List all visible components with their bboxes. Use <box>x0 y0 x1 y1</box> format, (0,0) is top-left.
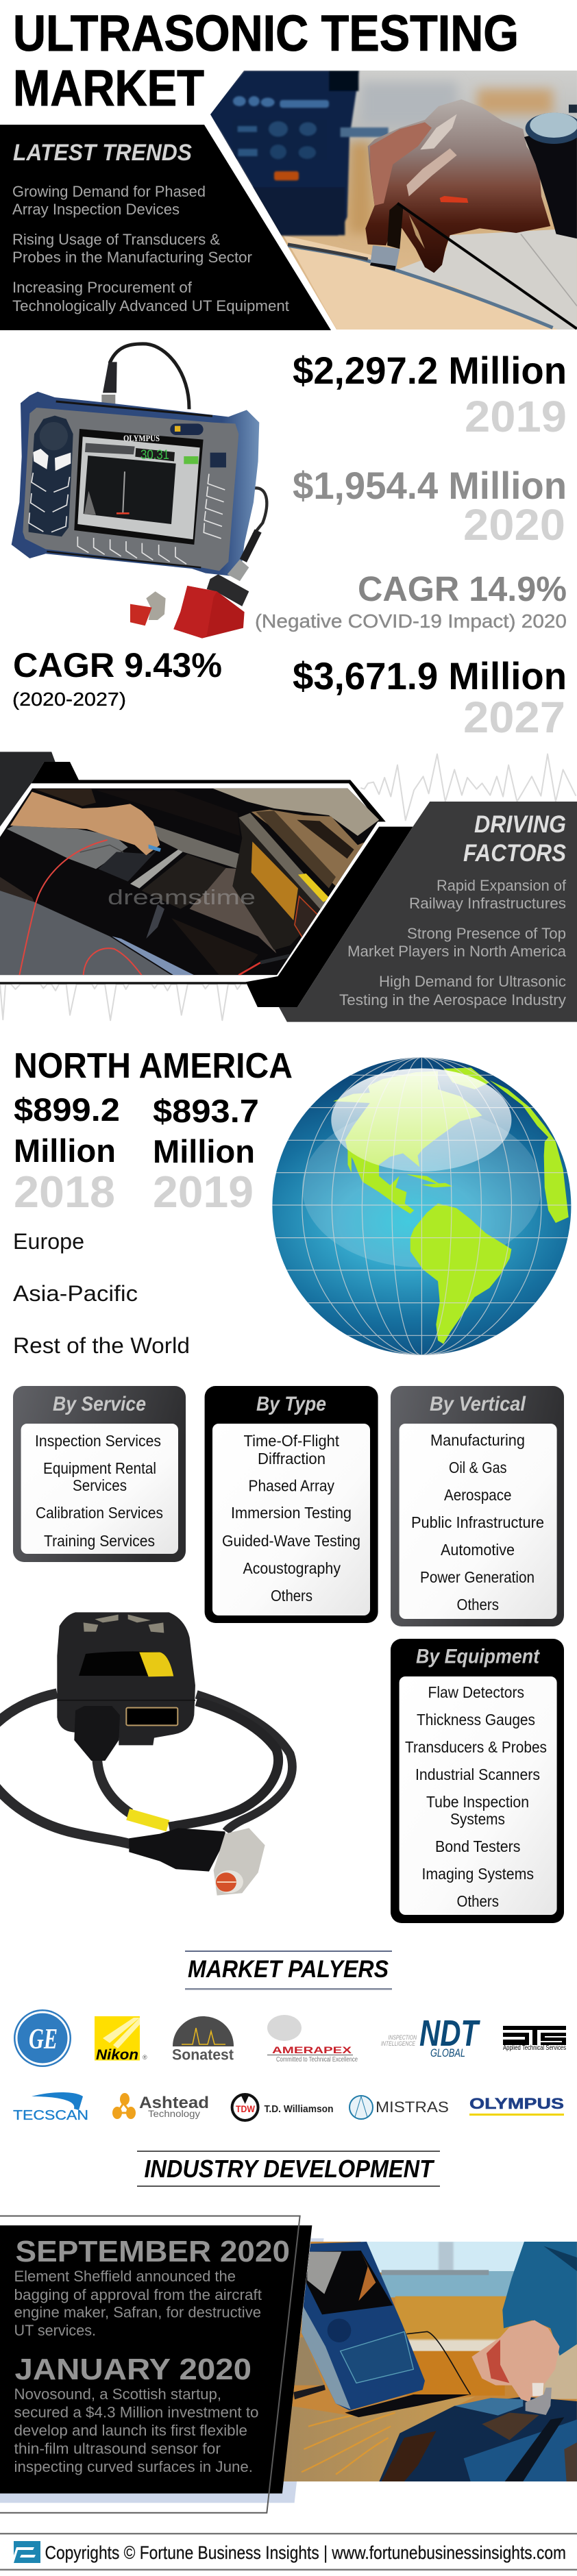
connector <box>129 1828 226 1872</box>
driving factors list: Testing in the Aerospace Industry <box>339 991 566 1008</box>
stat: forecast cagr: CAGR 9.43% <box>13 646 222 684</box>
items: Equipment Rental <box>43 1459 156 1477</box>
items: Acoustography <box>243 1559 341 1577</box>
tube <box>379 2397 577 2481</box>
stat: covid cagr <box>255 569 567 632</box>
heading: latest trends: LATEST TRENDS <box>13 140 192 166</box>
items: Others <box>456 1892 499 1910</box>
development: january 2020: inspecting curved surfaces in June. <box>14 2458 253 2475</box>
items: Training Services <box>44 1532 155 1550</box>
dark corner shape <box>0 752 56 827</box>
trend list: Technologically Advanced UT Equipment <box>12 297 289 314</box>
title <box>13 5 519 116</box>
logo: Amerapex: AMERAPEX <box>272 2044 352 2055</box>
logo: NDT Global: NDT <box>419 2013 480 2054</box>
device screen labels: 30.31 <box>140 448 169 462</box>
items: Aerospace <box>444 1486 511 1504</box>
photo: field ultrasonic inspection <box>281 2237 577 2484</box>
logo: Amerapex <box>267 2015 358 2064</box>
black panel background <box>0 2225 312 2493</box>
heading: market players: MARKET PALYERS <box>188 1956 389 1983</box>
items <box>405 1683 547 1910</box>
watch <box>524 123 577 238</box>
hand <box>471 2320 560 2403</box>
stat: 2027 market value <box>293 654 567 742</box>
items: Diffraction <box>258 1450 326 1467</box>
items: Guided-Wave Testing <box>222 1532 360 1550</box>
logo: NDT Global: INTELLIGENCE <box>381 2040 416 2047</box>
title: MARKET <box>13 60 204 116</box>
driving factors list <box>339 877 567 1008</box>
items: Calibration Services <box>36 1504 163 1522</box>
image: thickness gauge probe with cable <box>0 1612 292 1896</box>
driving factors list: Rapid Expansion of <box>437 877 567 894</box>
stat: 2020 market value: $1,954.4 Million <box>293 464 567 507</box>
photo watermark: dreamstime <box>108 885 256 909</box>
icon: Fortune Business Insights logo <box>14 2541 40 2563</box>
items: Industrial Scanners <box>415 1766 540 1783</box>
value 2019: $893.7 <box>153 1093 259 1129</box>
stat: 2019 market value: 2019 <box>465 392 567 441</box>
development: september 2020: engine maker, Safran, for destructive <box>14 2303 261 2321</box>
jacket <box>502 2242 577 2355</box>
logo: NDT Global: INSPECTION <box>388 2034 417 2041</box>
items: Inspection Services <box>35 1432 161 1450</box>
items: Phased Array <box>248 1477 334 1495</box>
stat: 2027 market value: 2027 <box>463 693 565 742</box>
items: Systems <box>450 1810 505 1828</box>
section: driving factors <box>0 752 577 1022</box>
items: Services <box>73 1476 127 1494</box>
heading: north america: NORTH AMERICA <box>14 1046 293 1086</box>
other regions: Rest of the World <box>13 1333 190 1358</box>
development: january 2020: secured a $4.3 Million investment to <box>14 2403 259 2421</box>
development: january 2020: thin-film ultrasound sensor for <box>14 2440 221 2457</box>
instrument <box>302 2242 425 2410</box>
icon: globe <box>258 1057 577 1355</box>
panel: latest trends <box>0 125 331 330</box>
logo: Sonatest: Sonatest <box>172 2046 234 2064</box>
stat: forecast cagr <box>12 646 222 710</box>
hand <box>365 99 550 273</box>
black frame <box>32 762 386 821</box>
pipe surface <box>283 2397 475 2481</box>
stat: 2020 market value: 2020 <box>463 500 565 549</box>
heading: industry development: INDUSTRY DEVELOPMENT <box>144 2155 435 2183</box>
card: by service <box>13 1386 186 1562</box>
logo: T.D. Williamson: TDW <box>236 2103 256 2114</box>
items: Others <box>456 1596 499 1613</box>
trend list: Array Inspection Devices <box>12 201 180 218</box>
value 2019: Million <box>153 1133 255 1169</box>
logo: Mistras: MISTRAS <box>376 2098 449 2116</box>
footer <box>0 2533 577 2571</box>
logo: Amerapex: Committed to Technical Excellence <box>276 2056 358 2064</box>
driving factors list: High Demand for Ultrasonic <box>379 973 566 990</box>
logos: market players <box>13 2009 566 2123</box>
panel: regional stats <box>13 1046 293 1358</box>
light blue backing <box>0 2238 324 2503</box>
logo: GE: GE <box>29 2024 58 2055</box>
stat: forecast cagr: (2020-2027) <box>12 689 126 710</box>
stat: 2019 market value: $2,297.2 Million <box>293 349 567 392</box>
items <box>35 1432 163 1550</box>
other regions: Asia-Pacific <box>13 1281 138 1306</box>
items: Bond Testers <box>435 1837 521 1855</box>
items: Imaging Systems <box>422 1865 534 1883</box>
heading: By Type <box>256 1393 326 1415</box>
logo: ATS <box>503 2026 566 2052</box>
wires <box>19 840 108 975</box>
other regions <box>13 1229 190 1358</box>
value 2018: Million <box>14 1132 116 1169</box>
items <box>411 1431 544 1613</box>
logo: TecScan: TECSCAN <box>13 2108 88 2123</box>
development: january 2020 <box>14 2353 259 2475</box>
photo: rail inspection <box>0 781 389 978</box>
logo: T.D. Williamson: T.D. Williamson <box>265 2103 333 2115</box>
development: january 2020: JANUARY 2020 <box>15 2353 251 2386</box>
card: by equipment <box>391 1639 564 1923</box>
logo: Olympus: OLYMPUS <box>469 2095 564 2112</box>
instrument <box>251 810 365 887</box>
heading: driving factors: DRIVING <box>474 811 566 838</box>
stat: 2020 market value <box>293 464 567 549</box>
device screen labels: OLYMPUS <box>123 433 160 443</box>
value 2019: 2019 <box>153 1167 254 1217</box>
trend list: Growing Demand for Phased <box>12 183 206 200</box>
logo: GE <box>14 2009 71 2067</box>
trend list <box>12 183 289 314</box>
device screen labels <box>123 433 169 462</box>
card: by type <box>205 1386 378 1623</box>
development: september 2020: bagging of approval from the aircraft <box>14 2286 262 2303</box>
heading: driving factors <box>463 811 566 867</box>
logo: Sonatest <box>172 2016 234 2064</box>
dark panel background <box>279 802 577 1022</box>
land <box>333 1067 569 1344</box>
driving factors list: Strong Presence of Top <box>407 925 566 942</box>
items: Flaw Detectors <box>428 1683 524 1701</box>
logo: T.D. Williamson <box>232 2094 333 2120</box>
meridians and parallels <box>258 1057 577 1355</box>
image: ultrasonic flaw detector device <box>12 344 267 639</box>
black diagonal band <box>246 827 413 1007</box>
items: Oil & Gas <box>449 1459 507 1476</box>
value 2019 <box>153 1093 259 1217</box>
heading: driving factors: FACTORS <box>463 840 566 867</box>
items: Immersion Testing <box>231 1504 352 1522</box>
development: september 2020: Element Sheffield announced the <box>14 2268 236 2285</box>
items: Transducers & Probes <box>405 1738 547 1756</box>
logo: Olympus <box>469 2095 564 2116</box>
stat: covid cagr: CAGR 14.9% <box>358 569 567 608</box>
outline frame <box>0 2216 300 2513</box>
stat: 2027 market value: $3,671.9 Million <box>293 654 567 697</box>
stat: 2019 market value <box>293 349 567 441</box>
logo: Nikon: ® <box>143 2054 147 2061</box>
gauge body <box>57 1612 195 1745</box>
logo: Ashtead <box>112 2093 209 2119</box>
items: Automotive <box>441 1541 515 1559</box>
panel: developments <box>0 2216 577 2513</box>
items: Thickness Gauges <box>417 1711 535 1729</box>
development: september 2020: UT services. <box>14 2322 96 2339</box>
development: september 2020 <box>14 2235 290 2339</box>
title: ULTRASONIC TESTING <box>13 5 519 62</box>
heading: By Equipment <box>416 1646 541 1668</box>
development: september 2020: SEPTEMBER 2020 <box>15 2235 290 2268</box>
value 2018: $899.2 <box>14 1091 120 1128</box>
development: january 2020: develop and launch its first flexible <box>14 2422 247 2439</box>
items: Power Generation <box>420 1568 535 1586</box>
probe <box>387 203 403 249</box>
other regions: Europe <box>13 1229 84 1254</box>
card: by vertical <box>391 1386 564 1626</box>
logo: NDT Global <box>381 2013 480 2059</box>
development: january 2020: Novosound, a Scottish startup, <box>14 2386 221 2403</box>
items: Public Infrastructure <box>411 1513 544 1531</box>
driving factors list: Market Players in North America <box>347 943 567 960</box>
photo: hand holding ultrasonic probe <box>208 69 577 331</box>
logo: Ashtead: Technology <box>148 2108 200 2119</box>
value 2018 <box>14 1091 120 1217</box>
trend list: Rising Usage of Transducers & <box>12 231 220 248</box>
logo: TecScan <box>13 2092 88 2123</box>
items <box>222 1432 360 1605</box>
value 2018: 2018 <box>14 1167 115 1217</box>
trend list: Probes in the Manufacturing Sector <box>12 249 252 266</box>
items: Time-Of-Flight <box>244 1432 340 1450</box>
driving factors panel <box>246 802 577 1022</box>
logo: Mistras <box>349 2096 449 2119</box>
items: Manufacturing <box>430 1431 525 1449</box>
heading: By Service <box>53 1393 146 1415</box>
driving factors list: Railway Infrastructures <box>409 895 566 912</box>
logo: Nikon: Nikon <box>96 2047 138 2063</box>
stat: covid cagr: (Negative COVID-19 Impact) 2020 <box>255 610 567 632</box>
logo: Ashtead: Ashtead <box>139 2094 209 2112</box>
trend list: Increasing Procurement of <box>12 279 193 296</box>
arm <box>10 792 160 855</box>
logo: Nikon <box>95 2016 147 2063</box>
logo: NDT Global: GLOBAL <box>430 2046 465 2059</box>
items: Tube Inspection <box>426 1793 529 1811</box>
heading: By Vertical <box>430 1393 526 1415</box>
items: Others <box>271 1587 312 1605</box>
